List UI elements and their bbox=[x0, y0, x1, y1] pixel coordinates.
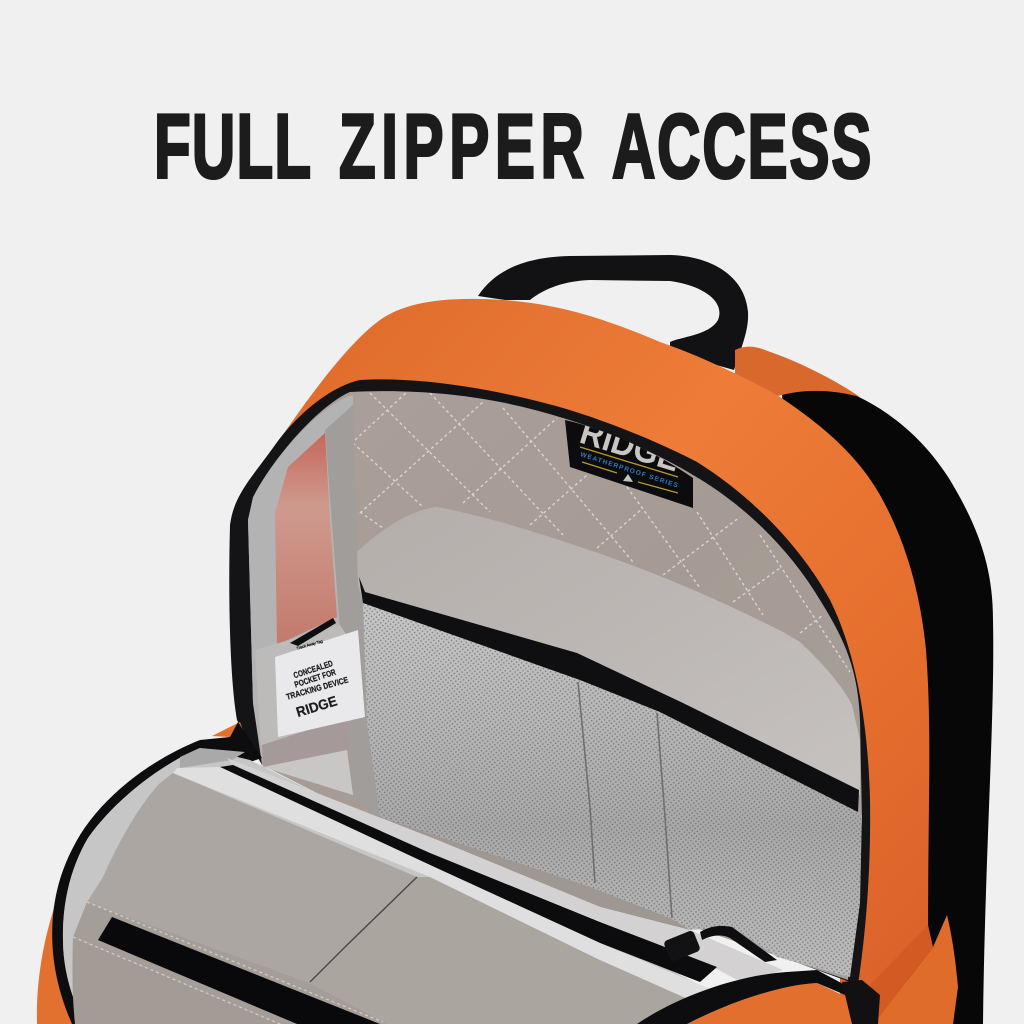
hang tag: TRACKING DEVICE bbox=[285, 674, 350, 702]
mesh pocket binding bbox=[359, 577, 859, 812]
orange front rim bbox=[37, 850, 90, 1024]
mesh pocket bbox=[363, 603, 862, 977]
panel divider bbox=[310, 877, 417, 982]
orange rear strip bbox=[735, 347, 860, 410]
brand label: WEATHERPROOF SERIES bbox=[579, 451, 679, 490]
lid zipper band bbox=[229, 379, 870, 985]
pocket seam stitching bbox=[73, 902, 383, 1024]
lower organizer pocket bbox=[310, 877, 697, 1024]
title: FULL bbox=[154, 96, 311, 198]
lid fold shadow bbox=[870, 925, 933, 1020]
pocket zipper bbox=[98, 917, 380, 1024]
hang tag: Track Away Tag bbox=[296, 638, 323, 651]
lower pocket shade bbox=[262, 717, 350, 767]
hang tag: POCKET FOR bbox=[293, 667, 337, 690]
upper white band bbox=[227, 758, 783, 983]
front zipper edge bbox=[52, 722, 262, 1024]
pocket strip between seams bbox=[73, 902, 388, 1024]
orange front lip bbox=[687, 983, 857, 1024]
padded sleeve bbox=[357, 507, 860, 795]
front compartment lining bbox=[63, 748, 700, 1024]
title: ZIPPER bbox=[339, 96, 584, 198]
side lining bbox=[248, 395, 353, 790]
top carry handle bbox=[478, 255, 748, 370]
orange rim fragment bbox=[212, 722, 246, 738]
zipper slider bbox=[663, 930, 701, 962]
tracker pocket bbox=[255, 625, 352, 745]
organizer panel bbox=[87, 773, 417, 983]
lower white binding bbox=[173, 767, 713, 1000]
orange lid bbox=[278, 299, 929, 1024]
hang tag bbox=[275, 630, 365, 737]
title: ACCESS bbox=[612, 96, 871, 198]
brand label: RIDGE bbox=[576, 410, 685, 479]
black side panel bbox=[782, 389, 993, 1024]
backpack bbox=[37, 255, 993, 1024]
taupe strip bbox=[350, 810, 690, 930]
hang tag: RIDGE bbox=[294, 692, 339, 720]
title bbox=[154, 96, 871, 198]
lip binding bbox=[637, 970, 857, 1024]
left lower pocket bbox=[72, 937, 280, 1024]
organizer zipper bbox=[220, 765, 717, 982]
interior back wall: quilted lining bbox=[248, 391, 862, 980]
pocket base panel bbox=[263, 750, 353, 795]
lining shade bbox=[180, 748, 245, 768]
orange corner bbox=[870, 915, 958, 1024]
brand label bbox=[565, 410, 693, 508]
hang tag: CONCEALED bbox=[292, 658, 334, 680]
zipper pull tab bbox=[700, 926, 777, 962]
pink reflection bbox=[275, 433, 337, 645]
tracker tab bbox=[290, 618, 336, 646]
side gusset bbox=[325, 405, 380, 817]
main zipper pull bbox=[842, 980, 880, 1024]
